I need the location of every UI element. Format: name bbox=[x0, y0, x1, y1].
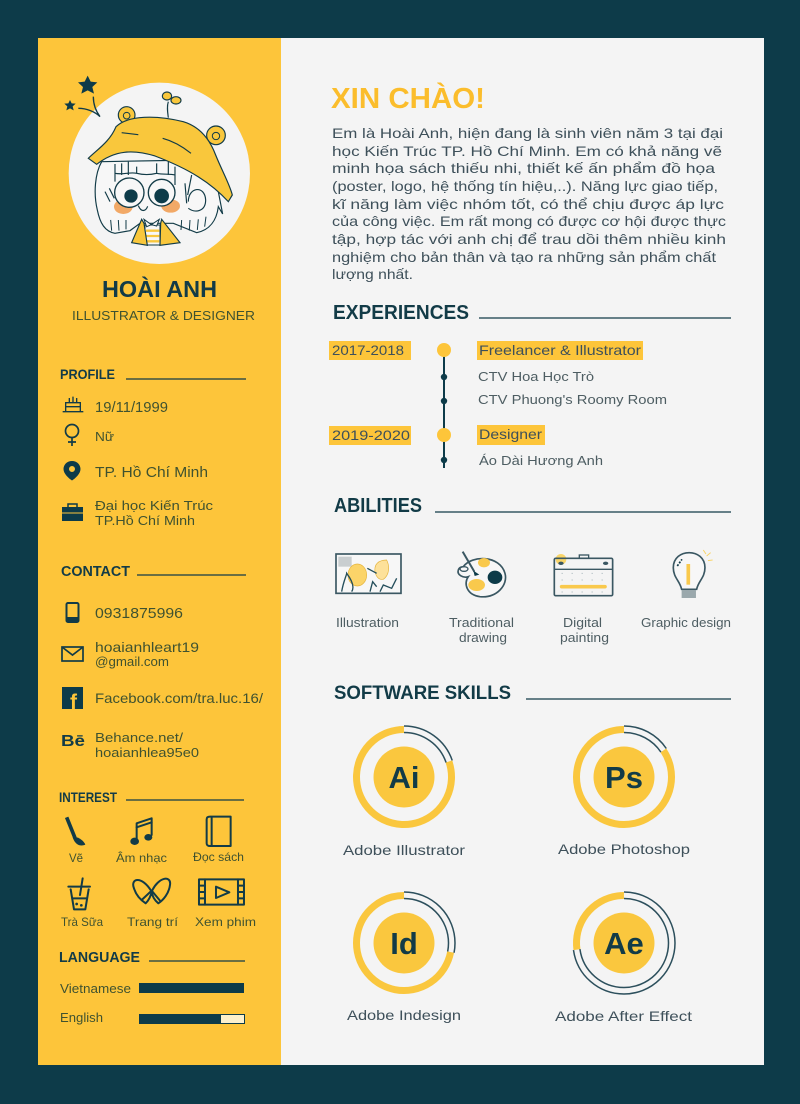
item: ao dai: Áo Dài Hương Anh bbox=[479, 453, 603, 468]
gender: Nữ bbox=[95, 429, 114, 444]
role: designer bbox=[477, 425, 545, 445]
intro paragraph: lượng nhất. bbox=[332, 266, 413, 282]
icon: facebook: f bbox=[70, 691, 78, 714]
skill: photoshop bbox=[558, 711, 690, 857]
ability icons bbox=[336, 550, 713, 598]
icon: birthday cake bbox=[63, 397, 83, 412]
university bbox=[95, 498, 214, 528]
panel: main content bbox=[281, 38, 764, 1065]
language: english bbox=[60, 1010, 244, 1025]
skill: illustrator bbox=[343, 717, 465, 858]
year 2019-2020 bbox=[329, 426, 411, 445]
item: roomy room: CTV Phuong's Roomy Room bbox=[478, 392, 667, 407]
behance link: hoaianhlea95e0 bbox=[95, 745, 199, 760]
intro paragraph: minh họa sách thiếu nhi, thiết kế ấn phẩm đồ họa bbox=[332, 160, 715, 176]
skill: illustrator: Adobe Illustrator bbox=[343, 842, 465, 858]
icon: mail bbox=[62, 647, 83, 661]
avatar illustration bbox=[64, 76, 250, 264]
skill: after effects: Ae bbox=[604, 926, 644, 961]
year 2017-2018: 2017-2018 bbox=[332, 342, 404, 358]
ability labels: Digital bbox=[563, 615, 602, 630]
date of birth: 19/11/1999 bbox=[95, 400, 168, 416]
facebook link: Facebook.com/tra.luc.16/ bbox=[95, 690, 263, 706]
intro paragraph: của công việc. Em rất mong có được cơ hội được thực bbox=[332, 213, 726, 229]
role: designer: Designer bbox=[479, 426, 542, 442]
skill: illustrator: Ai bbox=[388, 760, 420, 795]
ability labels: painting bbox=[560, 630, 609, 645]
name: HOÀI ANH bbox=[102, 275, 217, 302]
year 2019-2020: 2019-2020 bbox=[332, 427, 410, 443]
role: freelancer: Freelancer & Illustrator bbox=[479, 342, 641, 358]
language: vietnamese: Vietnamese bbox=[60, 981, 131, 996]
section: contact bbox=[61, 564, 263, 760]
heading: experiences: EXPERIENCES bbox=[333, 302, 469, 324]
skill: indesign bbox=[347, 887, 461, 1023]
university: Đại học Kiến Trúc bbox=[95, 498, 214, 513]
greeting heading: XIN CHÀO! bbox=[331, 81, 485, 115]
interest labels bbox=[61, 850, 256, 929]
intro paragraph: Em là Hoài Anh, hiện đang là sinh viên năm 3 tại đại bbox=[332, 125, 723, 141]
intro paragraph: kĩ năng làm việc nhóm tốt, có thể chịu được áp lực bbox=[332, 196, 724, 212]
heading: software skills: SOFTWARE SKILLS bbox=[334, 682, 511, 704]
skill: after effects bbox=[555, 889, 692, 1024]
skill: after effects: Adobe After Effect bbox=[555, 1008, 692, 1024]
timeline bbox=[437, 343, 451, 468]
section: software skills bbox=[334, 682, 731, 1024]
email: @gmail.com bbox=[95, 654, 169, 669]
interest labels: Trang trí bbox=[127, 915, 179, 929]
email: hoaianhleart19 bbox=[95, 639, 199, 655]
heading: profile: PROFILE bbox=[60, 366, 115, 382]
ability labels: Graphic design bbox=[641, 615, 731, 630]
section: abilities bbox=[334, 495, 731, 645]
icon: female bbox=[66, 424, 78, 446]
heading: language: LANGUAGE bbox=[59, 950, 140, 966]
language: vietnamese bbox=[60, 981, 244, 996]
interest labels: Đọc sách bbox=[193, 850, 244, 864]
icon: facebook bbox=[62, 687, 83, 714]
heading: abilities: ABILITIES bbox=[334, 495, 422, 517]
icon: briefcase bbox=[62, 504, 83, 521]
icon: phone bbox=[66, 603, 78, 622]
year 2017-2018 bbox=[329, 341, 411, 360]
section: interest bbox=[59, 789, 256, 929]
interest labels: Âm nhạc bbox=[116, 850, 167, 865]
ability labels: drawing bbox=[459, 630, 507, 645]
university: TP.Hồ Chí Minh bbox=[95, 513, 195, 528]
intro paragraph: (poster, logo, hệ thống tín hiệu,..). Năng lực giao tiếp, bbox=[332, 178, 718, 194]
intro paragraph: nghiệm cho bản thân và tạo ra những sản phẩm chất bbox=[332, 249, 716, 265]
ability labels: Illustration bbox=[336, 615, 399, 630]
skill: indesign: Id bbox=[390, 926, 418, 961]
language: english: English bbox=[60, 1010, 103, 1025]
ability labels: Traditional bbox=[449, 615, 514, 630]
icon: location pin bbox=[64, 461, 80, 480]
behance link bbox=[95, 730, 199, 760]
behance link: Behance.net/ bbox=[95, 730, 183, 745]
skill: photoshop: Adobe Photoshop bbox=[558, 841, 690, 857]
intro paragraph: tập, hợp tác với anh chị để trau dồi thêm nhiều kinh bbox=[332, 231, 726, 247]
skill: photoshop: Ps bbox=[605, 760, 643, 795]
heading: contact: CONTACT bbox=[61, 564, 130, 580]
interest labels: Trà Sữa bbox=[61, 915, 103, 929]
intro paragraph: học Kiến Trúc TP. Hồ Chí Minh. Em có khả năng vẽ bbox=[332, 143, 722, 159]
ability labels bbox=[336, 615, 731, 645]
city: TP. Hồ Chí Minh bbox=[95, 465, 208, 481]
icon: behance: Bē bbox=[61, 733, 85, 750]
interest icons bbox=[67, 817, 244, 909]
section: language bbox=[59, 950, 245, 1025]
interest labels: Xem phim bbox=[195, 915, 256, 929]
item: hoa hoc tro: CTV Hoa Học Trò bbox=[478, 369, 594, 384]
heading: interest: INTEREST bbox=[59, 789, 117, 805]
panel: sidebar bbox=[38, 38, 281, 1065]
section: profile bbox=[60, 366, 246, 528]
intro paragraph bbox=[332, 125, 726, 282]
interest labels: Vẽ bbox=[69, 851, 83, 865]
email bbox=[95, 639, 199, 669]
section: experiences bbox=[329, 302, 731, 468]
skill: indesign: Adobe Indesign bbox=[347, 1007, 461, 1023]
phone number: 0931875996 bbox=[95, 606, 183, 622]
job title: ILLUSTRATOR & DESIGNER bbox=[72, 308, 255, 323]
